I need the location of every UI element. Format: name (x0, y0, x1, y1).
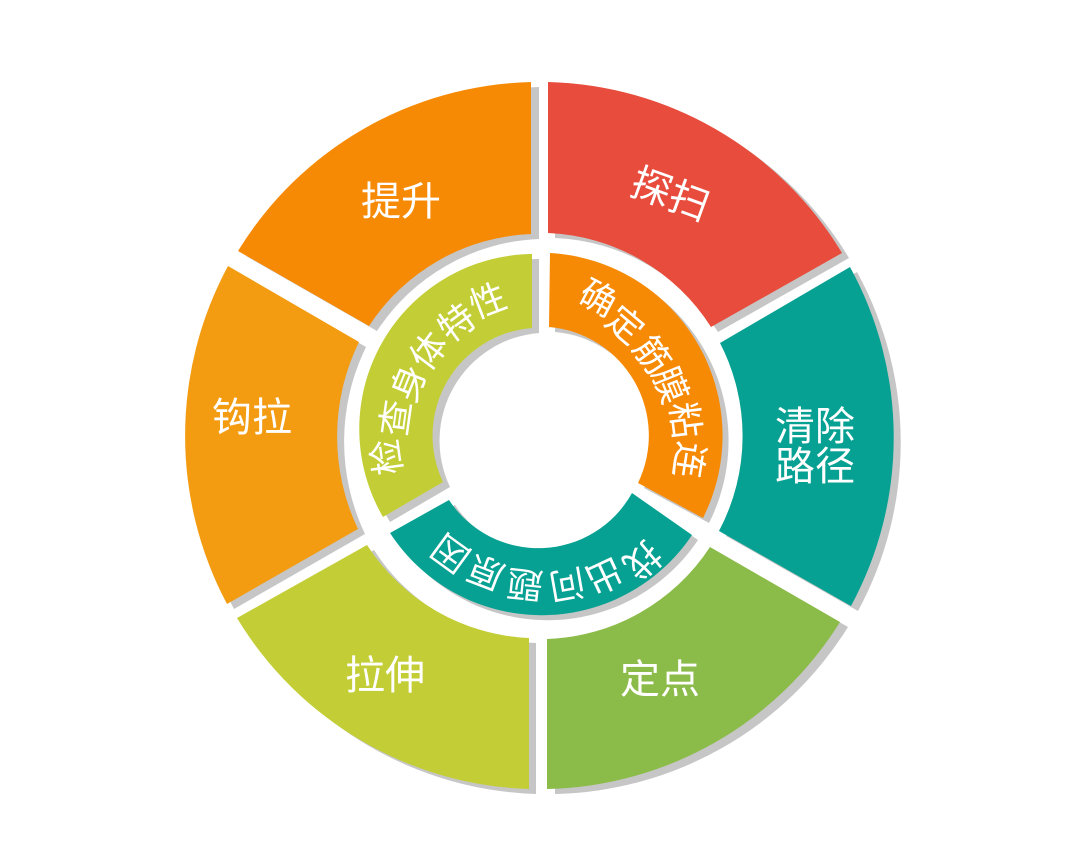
outer segment: 拉伸 (237, 545, 536, 794)
outer segment: 探扫: 探扫 (625, 161, 715, 229)
inner segment: 找出问题原因: 题 (505, 562, 545, 606)
outer segment: 清除路径: 路径 (775, 445, 855, 489)
inner segment: 找出问题原因 (390, 493, 698, 620)
outer segment: 清除路径: 清除 (775, 405, 855, 449)
inner segment: 找出问题原因: 原 (462, 546, 510, 598)
inner segment: 确定筋膜粘连: 膜 (644, 361, 696, 409)
outer segment: 定点 (547, 547, 848, 794)
inner segment: 确定筋膜粘连: 连 (666, 439, 712, 481)
inner segment: 检查身体特性: 查 (373, 397, 419, 439)
inner segment: 检查身体特性: 体 (402, 324, 456, 378)
inner segment: 检查身体特性: 特 (430, 296, 484, 350)
inner segment: 找出问题原因: 出 (579, 549, 629, 601)
outer segment: 提升 (238, 82, 539, 331)
outer segment: 拉伸: 拉伸 (345, 654, 425, 698)
inner segment: 确定筋膜粘连: 定 (598, 298, 652, 352)
inner segment: 找出问题原因: 问 (546, 561, 588, 607)
outer segment: 清除路径 (719, 267, 901, 611)
outer segment: 钩拉 (185, 266, 366, 609)
inner segment: 找出问题原因: 找 (615, 533, 669, 587)
inner segment: 找出问题原因: 因 (424, 526, 478, 580)
inner segment: 确定筋膜粘连: 确 (572, 271, 624, 325)
outer segment: 提升: 提升 (361, 180, 441, 224)
inner segment: 确定筋膜粘连: 粘 (662, 400, 708, 440)
inner segment: 检查身体特性: 性 (464, 275, 512, 327)
inner segment: 检查身体特性: 检 (364, 436, 410, 478)
inner segment: 检查身体特性 (359, 254, 539, 522)
inner segment: 检查身体特性: 身 (383, 359, 435, 407)
outer segment: 探扫 (548, 82, 849, 332)
outer segment: 定点: 定点 (620, 658, 700, 702)
inner segment: 确定筋膜粘连: 筋 (625, 328, 679, 382)
inner segment: 确定筋膜粘连 (549, 253, 729, 523)
outer segment: 钩拉: 钩拉 (212, 396, 292, 440)
